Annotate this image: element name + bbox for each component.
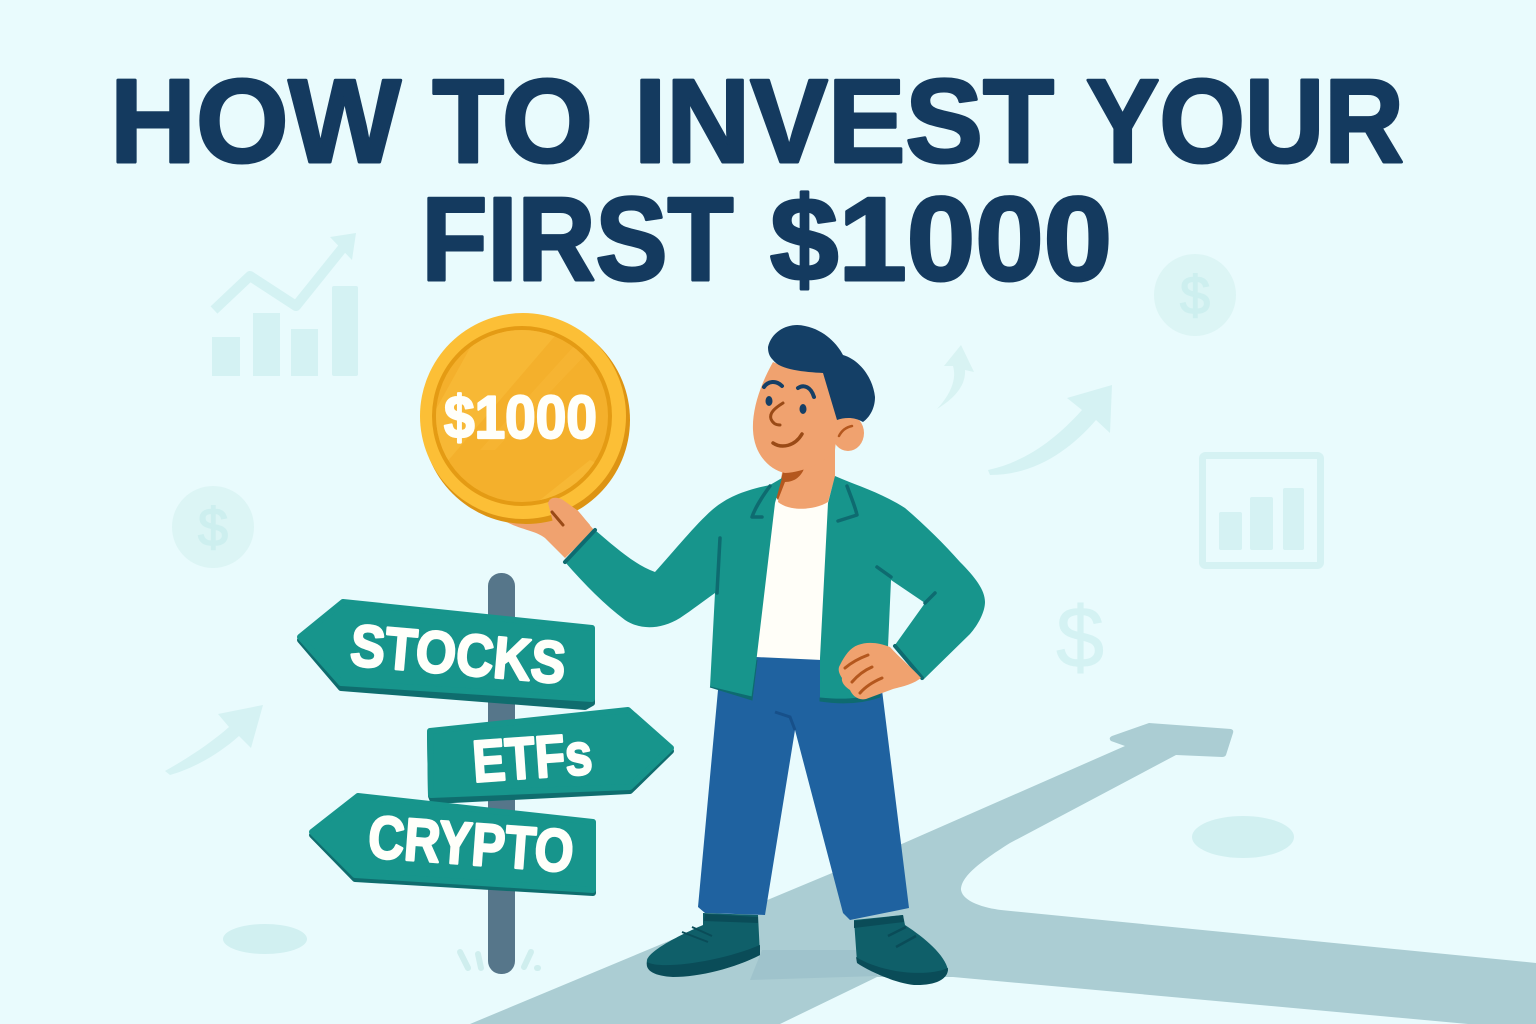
- ear: [832, 415, 864, 451]
- title line one: HOW: [110, 55, 401, 188]
- coin value: $1000: [444, 385, 597, 452]
- background ellipse: right of road: [1192, 816, 1294, 858]
- coin: [420, 313, 630, 525]
- title line two: FIRST: [422, 173, 733, 306]
- background icon: lower left arrow: [165, 705, 263, 775]
- jacket folds and lapels: [717, 486, 935, 678]
- neck shadow: [776, 466, 805, 500]
- title line one: TO: [432, 55, 593, 188]
- coin ring: [432, 326, 612, 506]
- left shoe: [647, 913, 760, 977]
- background icon: small up arrow: [937, 345, 974, 409]
- signpost: [300, 573, 671, 974]
- road shadow forking path with arrow: [470, 723, 1536, 1024]
- background icon: bar chart with rising line: [212, 233, 358, 376]
- background icon: framed bar chart: [1202, 456, 1320, 566]
- hand holding coin: [503, 505, 594, 558]
- shirt: [756, 500, 830, 660]
- background ellipse: lower left: [223, 924, 307, 954]
- coin highlights: [436, 330, 594, 500]
- hair: [768, 325, 875, 422]
- background icon: dollar coin right: $: [1180, 266, 1210, 326]
- pants: [698, 650, 909, 920]
- character: [565, 325, 985, 985]
- title line one: INVEST: [634, 54, 1054, 187]
- background icon: dollar coin left: [172, 486, 254, 568]
- face: [753, 362, 838, 473]
- sign: ETFs: [430, 710, 671, 801]
- thumb and sleeve cuff: [548, 498, 595, 562]
- background icon: dollar coin right: [1154, 254, 1236, 336]
- sign: crypto: [312, 796, 593, 893]
- sign: crypto: CRYPTO: [366, 803, 576, 885]
- sign: stocks: STOCKS: [348, 612, 568, 696]
- sign: ETFs: ETFs: [470, 722, 594, 795]
- coin rim: [420, 313, 626, 519]
- neck: [778, 440, 835, 509]
- facial features: [764, 382, 814, 446]
- title line two: $1000: [770, 172, 1112, 306]
- title: [110, 54, 1404, 306]
- title line one: [110, 54, 1404, 188]
- title line one: YOUR: [1086, 55, 1404, 188]
- coin edge: [422, 316, 630, 524]
- shadow under the feet: [750, 950, 878, 980]
- background icon: dollar sign: $: [1056, 590, 1104, 686]
- background icon: large curved arrow: [988, 385, 1112, 475]
- right shoe: [854, 915, 948, 985]
- post: [488, 573, 515, 974]
- grass marks: [460, 952, 538, 968]
- coin face: [436, 330, 608, 502]
- hand on hip: [839, 643, 921, 699]
- sign: stocks: [300, 602, 592, 707]
- title line two: [422, 172, 1112, 306]
- background icon: dollar coin left: $: [198, 498, 228, 558]
- jacket hem shadow: [710, 660, 880, 703]
- jacket: [565, 476, 985, 703]
